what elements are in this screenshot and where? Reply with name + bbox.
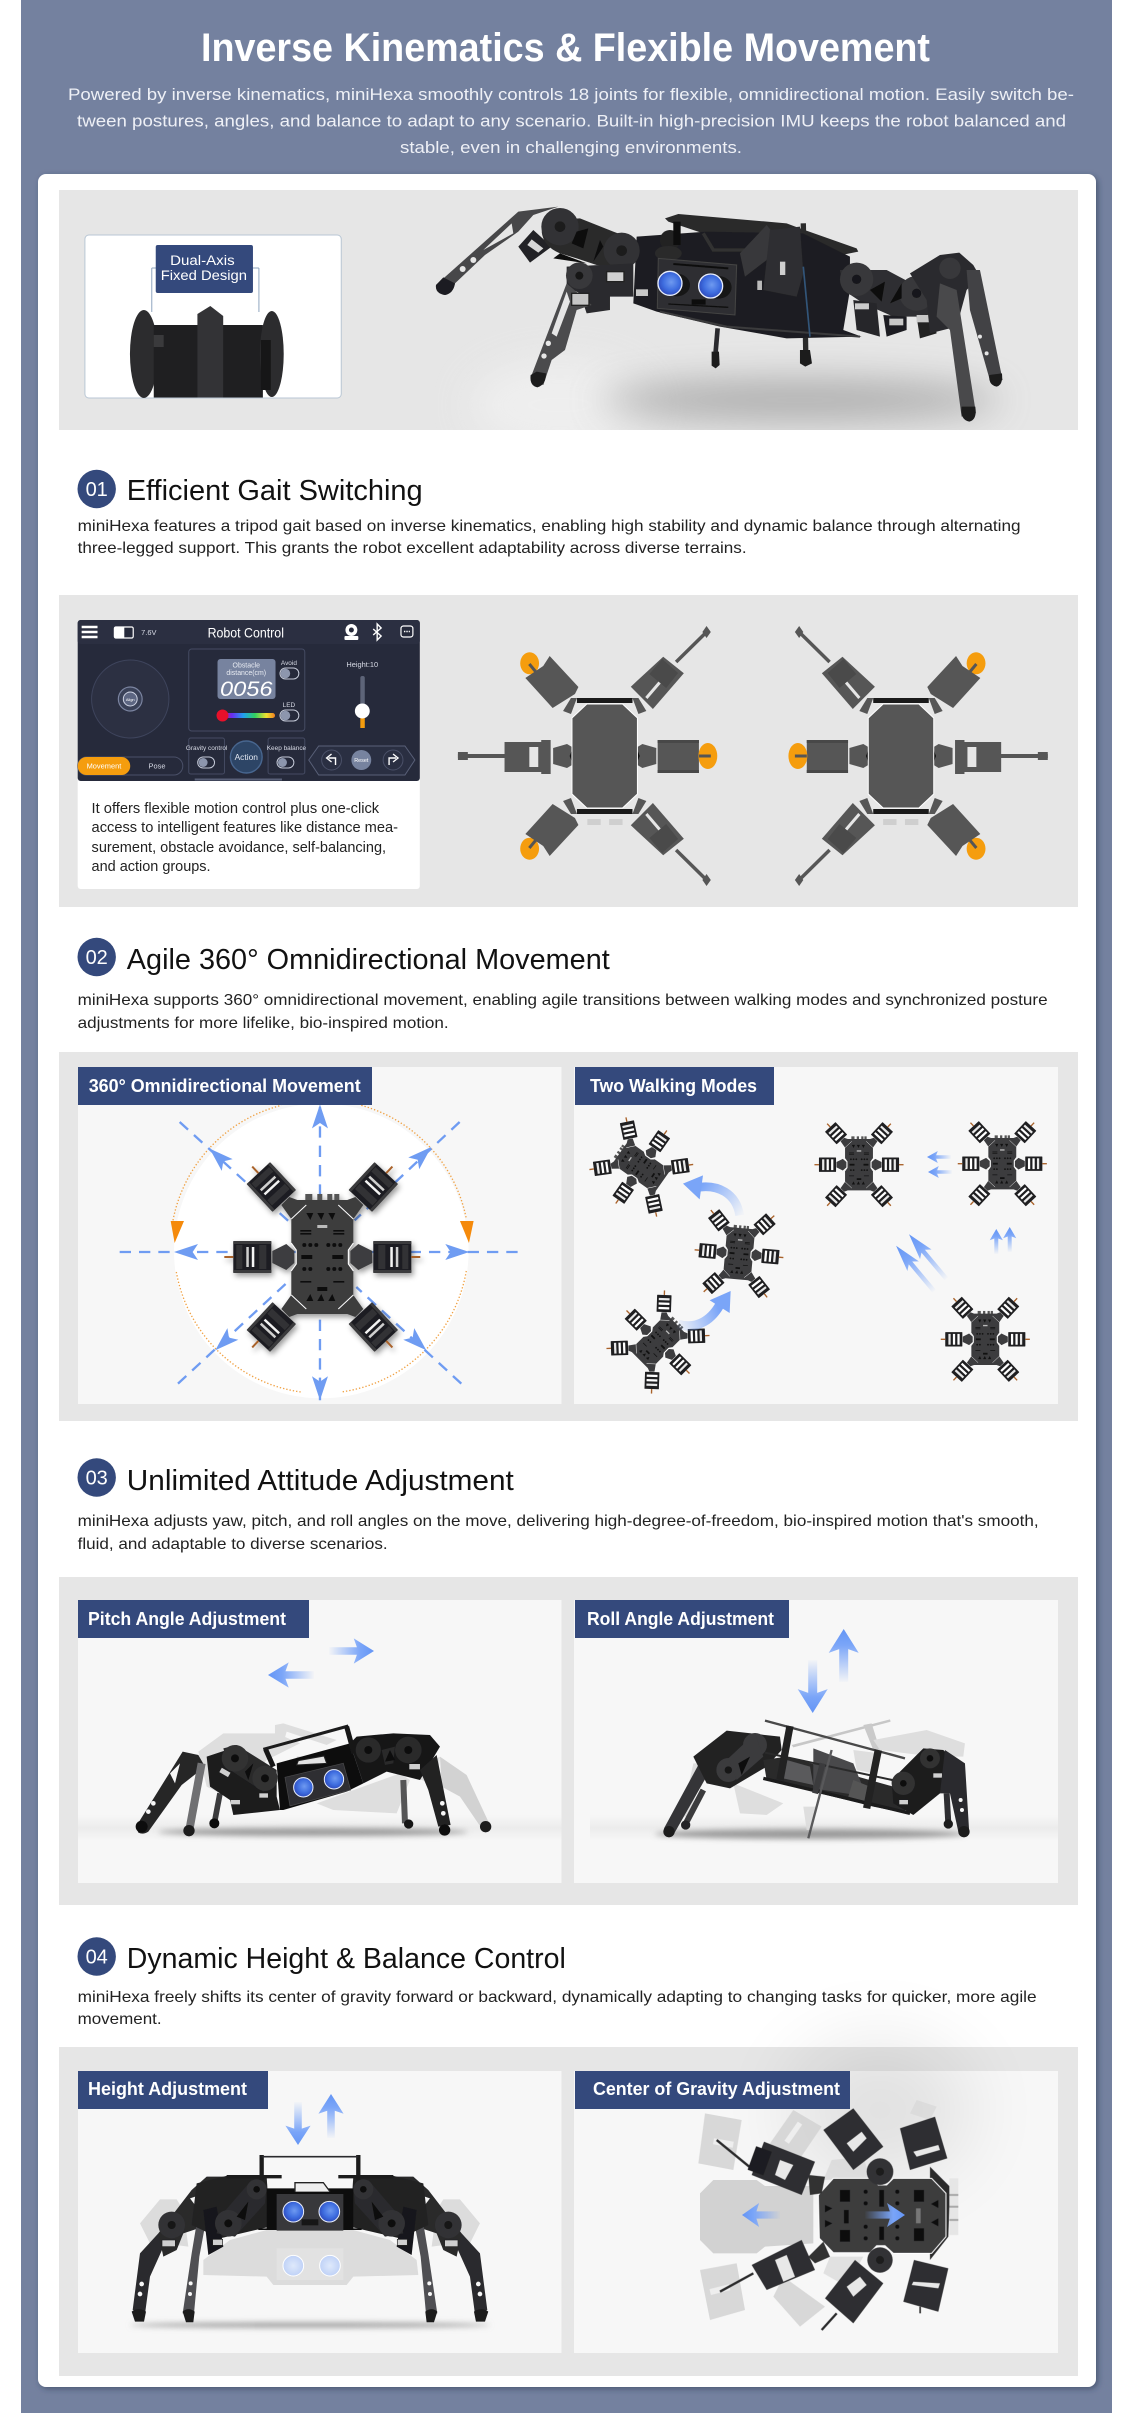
app: robot control screen	[78, 620, 420, 781]
sub-panel: two walking modes	[574, 1067, 1058, 1406]
small robots	[578, 1104, 1047, 1406]
label: roll angle adjustment	[575, 1600, 789, 1638]
section 01 body text: miniHexa features a tripod gait based on inverse kinematics, enabling high stability and dynamic balance through alternating	[78, 518, 1021, 535]
label: 360 omnidirectional movement: 360° Omnidirectional Movement	[89, 1076, 361, 1096]
sub-panel: height adjustment	[78, 2071, 562, 2353]
robot: center of gravity pose	[698, 2100, 958, 2330]
section 01 body text	[78, 518, 1021, 557]
panel: gait switching	[59, 595, 1078, 907]
intro paragraph: Powered by inverse kinematics, miniHexa smoothly controls 18 joints for flexible, omnidirectional motion. Easily switch be-	[68, 85, 1074, 104]
label: pitch angle adjustment	[78, 1600, 309, 1638]
app caption text: surement, obstacle avoidance, self-balancing,	[92, 840, 386, 856]
gait diagram: tripod phase A	[458, 626, 717, 886]
panel: section 04	[59, 2040, 1078, 2376]
intro paragraph: tween postures, angles, and balance to adapt to any scenario. Built-in high-precision IMU keeps the robot balanced and	[77, 112, 1066, 130]
app: robot control screen: 7.6V	[141, 628, 156, 637]
label: two walking modes	[575, 1067, 774, 1105]
label: center of gravity adjustment: Center of Gravity Adjustment	[593, 2079, 840, 2099]
app: robot control screen: Align	[126, 697, 135, 702]
app: robot control screen: LED	[283, 702, 296, 709]
app screenshot and caption	[78, 620, 420, 889]
label: height adjustment: Height Adjustment	[88, 2079, 247, 2099]
app: robot control screen: Robot Control	[208, 625, 284, 641]
panel: section 03	[59, 1577, 1078, 1905]
app: robot control screen: Avoid	[281, 660, 297, 667]
label: Dual-Axis Fixed Design	[156, 245, 253, 293]
label: Dual-Axis Fixed Design: Fixed Design	[161, 267, 247, 283]
arrows: roll	[798, 1629, 859, 1713]
robot: pitch pose	[136, 1723, 491, 1836]
app: robot control screen: Pose	[149, 761, 165, 771]
app: robot control screen: Movement	[87, 761, 122, 771]
sub-panel: center of gravity adjustment	[574, 2040, 1058, 2353]
panel: section 02	[59, 1052, 1078, 1421]
section 02 heading: Agile 360° Omnidirectional Movement	[127, 944, 610, 976]
section 03 body text	[78, 1513, 1039, 1553]
robot: hero hexapod	[436, 207, 1003, 422]
section 02 heading: 02	[86, 947, 108, 969]
arrows: walking direction	[678, 1151, 1016, 1326]
section 03 heading: 03	[86, 1468, 108, 1490]
section 02 body text	[78, 992, 1048, 1032]
intro paragraph: stable, even in challenging environments.	[400, 138, 742, 157]
app caption text	[92, 801, 398, 875]
robot: top view	[224, 1156, 420, 1358]
app: robot control screen: Height:10	[346, 660, 378, 669]
section 04 body text: movement.	[78, 2011, 162, 2028]
label: center of gravity adjustment	[575, 2071, 850, 2109]
section 03 heading: Unlimited Attitude Adjustment	[127, 1465, 514, 1497]
section 01 heading: 01	[86, 479, 108, 501]
app caption text: and action groups.	[92, 859, 211, 875]
inset: dual-axis fixed design	[85, 235, 341, 398]
arrows: center of gravity	[742, 2203, 905, 2227]
section 01 body text: three-legged support. This grants the robot excellent adaptability across diverse terrains.	[78, 540, 747, 557]
section 04 heading: 04	[86, 1946, 108, 1968]
app: robot control screen: Gravity control	[186, 745, 227, 752]
label: two walking modes: Two Walking Modes	[590, 1076, 757, 1096]
intro paragraph	[68, 85, 1074, 157]
section 03 body text: miniHexa adjusts yaw, pitch, and roll angles on the move, delivering high-degree-of-freedom, bio-inspired motion that's smooth,	[78, 1513, 1039, 1530]
label: roll angle adjustment: Roll Angle Adjustment	[587, 1609, 774, 1629]
robot: height pose	[132, 2155, 488, 2322]
app: robot control screen: distance(cm)	[226, 670, 266, 677]
title: Inverse Kinematics & Flexible Movement	[201, 26, 930, 70]
gait diagram: tripod phase B	[788, 626, 1048, 886]
section 02 body text: adjustments for more lifelike, bio-inspired motion.	[78, 1015, 449, 1032]
sub-panel: 360 omnidirectional movement	[78, 1067, 562, 1404]
robot: roll pose	[663, 1719, 970, 1838]
panel: hero robot	[59, 190, 1078, 450]
section 03 body text: fluid, and adaptable to diverse scenarios.	[78, 1536, 388, 1553]
sub-panel: roll angle adjustment	[574, 1600, 1058, 1883]
app: robot control screen: Reset	[354, 758, 369, 764]
label: pitch angle adjustment: Pitch Angle Adjustment	[88, 1609, 286, 1629]
section 04 heading: Dynamic Height & Balance Control	[127, 1943, 566, 1975]
sub-panel: pitch angle adjustment	[78, 1600, 562, 1883]
section 04 body text: miniHexa freely shifts its center of gravity forward or backward, dynamically adapting to changing tasks for quicker, more agile	[78, 1989, 1037, 2006]
app: robot control screen: Action	[235, 752, 258, 762]
app: robot control screen: 0056	[220, 678, 273, 701]
section 02 body text: miniHexa supports 360° omnidirectional movement, enabling agile transitions between walking modes and synchronized posture	[78, 992, 1048, 1009]
app: robot control screen: Obstacle	[233, 662, 260, 670]
label: Dual-Axis Fixed Design: Dual-Axis	[170, 252, 235, 268]
arrows: pitch	[268, 1638, 374, 1688]
app caption text: It offers flexible motion control plus one-click	[92, 801, 380, 817]
section 01 heading: Efficient Gait Switching	[127, 475, 423, 507]
app: robot control screen: Keep balance	[267, 745, 307, 752]
section 04 body text	[78, 1989, 1037, 2028]
label: 360 omnidirectional movement	[78, 1067, 372, 1105]
arrows: height	[285, 2094, 344, 2145]
app caption text: access to intelligent features like distance mea-	[92, 820, 398, 836]
label: height adjustment	[78, 2071, 268, 2109]
